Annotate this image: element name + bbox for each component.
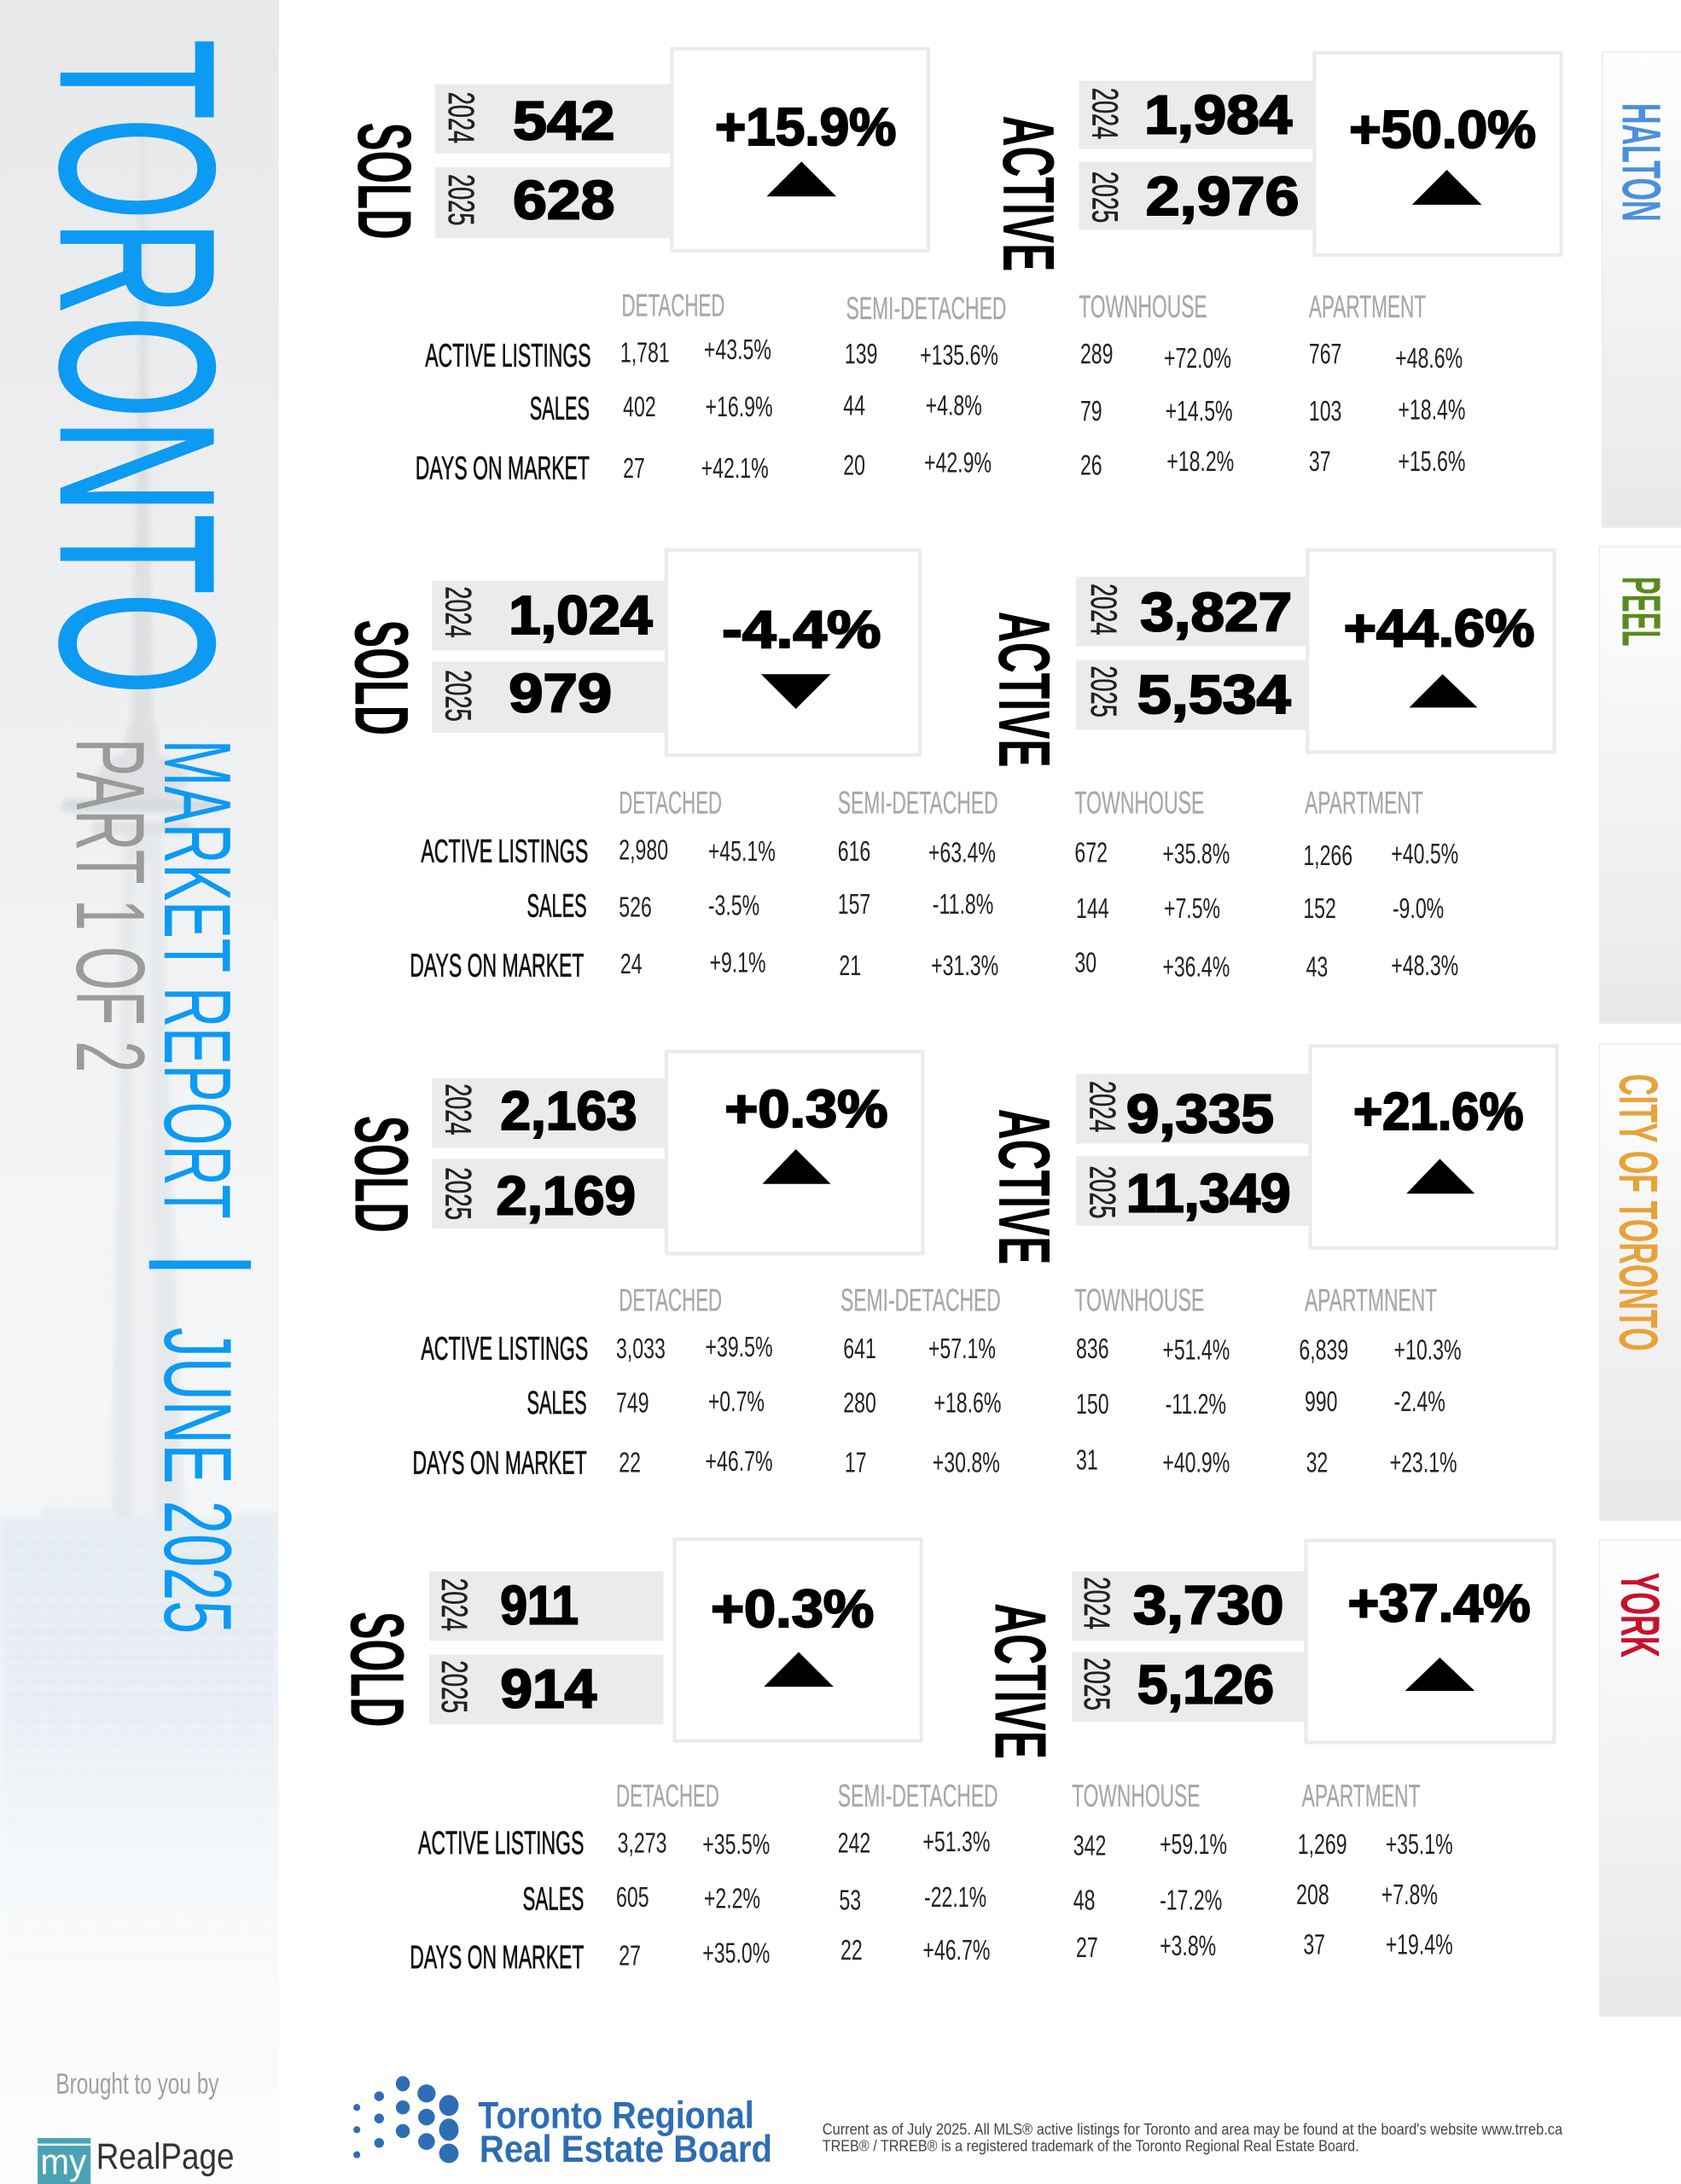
table: Peel property types: ACTIVE LISTINGS (421, 834, 588, 869)
table: Peel property types: 144 (1076, 893, 1109, 925)
table: Halton property types: 26 (1080, 450, 1102, 482)
table: Peel property types: 526 (619, 892, 652, 923)
table: City of Toronto property types: 990 (1305, 1386, 1337, 1418)
table: Peel property types: -9.0% (1393, 893, 1444, 925)
table: City of Toronto property types: 22 (619, 1448, 641, 1479)
region tab: Peel (1599, 547, 1681, 1023)
table: City of Toronto property types: +0.7% (708, 1386, 765, 1418)
table: York property types: 3,273 (618, 1827, 666, 1860)
sold comparison (340, 1052, 922, 1253)
active comparison (979, 1541, 1554, 1759)
sold comparison: 2025 (434, 1660, 474, 1713)
sold comparison: 2024 (439, 1083, 479, 1136)
region tab: York: YORK (1609, 1572, 1670, 1658)
subtitle: date: JUNE 2025 (144, 1327, 252, 1634)
region tab: Peel: PEEL (1610, 577, 1671, 647)
table: Peel property types: +45.1% (708, 836, 776, 868)
table: City of Toronto property types: +30.8% (933, 1448, 1000, 1479)
table: Halton property types: 767 (1309, 339, 1341, 370)
table: Peel property types: +36.4% (1162, 951, 1230, 984)
table: City of Toronto property types: +10.3% (1393, 1334, 1461, 1367)
table: Peel property types: 21 (839, 950, 861, 982)
table: City of Toronto property types: +23.1% (1390, 1448, 1457, 1479)
table: City of Toronto property types: 3,033 (616, 1333, 666, 1365)
active comparison: 2,976 (1146, 166, 1299, 227)
table: Peel property types: 157 (838, 889, 870, 921)
sold comparison (340, 550, 920, 755)
table: York property types: 48 (1073, 1885, 1095, 1917)
table: Halton property types: 79 (1080, 396, 1102, 427)
table: York property types: +35.1% (1386, 1829, 1453, 1861)
table: Peel property types: TOWNHOUSE (1074, 785, 1204, 820)
table: City of Toronto property types: SALES (526, 1385, 587, 1420)
table: York property types: 27 (619, 1941, 641, 1972)
table: City of Toronto property types: 749 (616, 1387, 649, 1420)
table: Halton property types: SALES (530, 390, 590, 426)
table: Peel property types: 1,266 (1303, 840, 1352, 872)
sold comparison: 914 (500, 1659, 597, 1720)
table: City of Toronto property types: -11.2% (1166, 1389, 1226, 1420)
active comparison: 9,335 (1126, 1083, 1274, 1144)
table: Halton property types: 1,781 (620, 337, 670, 369)
table: Halton property types: TOWNHOUSE (1079, 289, 1207, 324)
active comparison: 2024 (1085, 88, 1126, 139)
table: City of Toronto property types: 17 (845, 1448, 867, 1479)
active comparison: ACTIVE (983, 612, 1065, 768)
brought to you by: Brought to you by (55, 2068, 219, 2100)
table: Halton property types: +18.4% (1398, 394, 1465, 427)
table: City of Toronto property types: SEMI-DETACHED (840, 1282, 1001, 1317)
active comparison: 2024 (1077, 1577, 1117, 1629)
table: York property types: DAYS ON MARKET (410, 1939, 584, 1975)
table: York property types: 208 (1296, 1879, 1329, 1911)
active comparison: ACTIVE (979, 1603, 1061, 1759)
table: Halton property types: +15.6% (1398, 446, 1465, 478)
table: Peel property types: +40.5% (1391, 839, 1458, 870)
table: York property types: +3.8% (1160, 1931, 1216, 1962)
sold comparison: +15.9% (715, 98, 896, 157)
table: Peel property types: -3.5% (708, 891, 759, 922)
active comparison (983, 550, 1554, 768)
table: Peel property types: 30 (1074, 947, 1096, 979)
table: Peel property types: 152 (1303, 893, 1336, 925)
sold comparison: 628 (513, 170, 614, 230)
table: York property types: +19.4% (1386, 1930, 1453, 1961)
sold comparison: -4.4% (722, 601, 881, 659)
table: Halton property types: DAYS ON MARKET (416, 450, 590, 486)
table: York property types: SEMI-DETACHED (838, 1779, 998, 1814)
table: Halton property types: 44 (843, 390, 865, 422)
table: City of Toronto property types: DAYS ON MARKET (413, 1444, 587, 1480)
sold comparison: SOLD (335, 1612, 421, 1727)
table: Halton property types: ACTIVE LISTINGS (425, 337, 591, 373)
sold comparison: 979 (509, 663, 612, 723)
table: York property types: 27 (1076, 1932, 1098, 1964)
TRREB logo (353, 2076, 772, 2170)
table: City of Toronto property types: +51.4% (1162, 1334, 1230, 1367)
table: Peel property types: DAYS ON MARKET (410, 947, 584, 983)
panel: York (335, 1539, 1681, 2016)
table: City of Toronto property types: 280 (843, 1387, 876, 1420)
active comparison: 2024 (1082, 1081, 1122, 1132)
table: Peel property types: APARTMENT (1305, 785, 1423, 820)
table: City of Toronto property types: 6,839 (1299, 1334, 1348, 1367)
disclaimer text: TREB® / TRREB® is a registered trademark of the Toronto Regional Real Estate Board. (823, 2137, 1359, 2155)
sold comparison: 2,169 (497, 1166, 636, 1227)
panel: Peel (340, 547, 1681, 1023)
table: City of Toronto property types: +39.5% (706, 1332, 773, 1363)
table: City of Toronto property types: TOWNHOUSE (1074, 1282, 1204, 1317)
table: York property types: 37 (1303, 1930, 1325, 1961)
table: City of Toronto property types: DETACHED (619, 1282, 722, 1317)
panel: Halton (342, 49, 1681, 527)
table: Peel property types: 43 (1306, 951, 1328, 984)
table: Halton property types: +42.9% (924, 447, 992, 479)
table: Peel property types: 24 (620, 949, 643, 980)
logo wordmark: Toronto Regional (478, 2095, 754, 2137)
table: York property types: 342 (1073, 1831, 1106, 1862)
sold comparison: 1,024 (509, 585, 653, 646)
active comparison: ACTIVE (983, 1109, 1065, 1264)
active comparison: 2024 (1084, 584, 1124, 635)
disclaimer text: Current as of July 2025. All MLS® active listings for Toronto and area may be found at the board's website www.trreb.ca (823, 2120, 1563, 2138)
active comparison: 2025 (1084, 665, 1124, 717)
table: York property types: 242 (838, 1827, 870, 1860)
disclaimer text (823, 2120, 1563, 2155)
table: York property types: +46.7% (922, 1935, 990, 1966)
table: Halton property types: APARTMENT (1309, 289, 1426, 324)
sold comparison: +0.3% (724, 1080, 888, 1139)
table: York property types: SALES (523, 1880, 584, 1916)
table: Halton property types: 289 (1080, 339, 1114, 370)
sold comparison (335, 1539, 922, 1741)
active comparison (987, 53, 1562, 271)
table: Halton property types: +16.9% (706, 392, 773, 423)
sold comparison: 2024 (439, 586, 479, 638)
sold comparison: SOLD (340, 620, 425, 735)
table: Halton property types: SEMI-DETACHED (846, 291, 1006, 326)
active comparison: +37.4% (1348, 1574, 1531, 1633)
table: City of Toronto property types: +46.7% (706, 1446, 773, 1478)
table: York property types: +35.5% (702, 1829, 770, 1861)
active comparison: 2025 (1077, 1658, 1117, 1711)
panel: City of Toronto (340, 1044, 1681, 1520)
icon: dot cluster (353, 2076, 458, 2164)
active comparison: 5,126 (1137, 1655, 1274, 1716)
region tab: York (1599, 1540, 1681, 2016)
active comparison: ACTIVE (987, 116, 1069, 271)
table: Peel property types: +31.3% (931, 950, 998, 982)
subtitle: market report: MARKET REPORT (144, 740, 251, 1219)
table: Halton property types: +43.5% (704, 334, 771, 366)
table: City of Toronto property types: 836 (1076, 1333, 1109, 1365)
sold comparison: SOLD (342, 123, 428, 240)
table: Peel property types: +63.4% (928, 838, 996, 869)
table: Halton property types: +4.8% (926, 390, 982, 422)
table: York property types: DETACHED (616, 1779, 719, 1814)
table: Halton property types: 139 (845, 339, 877, 370)
active comparison: 3,730 (1133, 1576, 1283, 1636)
table: Peel property types: 672 (1074, 838, 1108, 869)
logo wordmark (478, 2095, 772, 2170)
sold comparison: 542 (513, 90, 614, 151)
table: Halton property types: DETACHED (622, 288, 724, 323)
table: City of Toronto property types: 31 (1076, 1444, 1098, 1477)
table: York property types: +59.1% (1160, 1829, 1227, 1861)
table: City of Toronto property types: +40.9% (1162, 1448, 1230, 1479)
table: Halton property types: +18.2% (1166, 446, 1234, 478)
sold comparison: +0.3% (711, 1580, 874, 1639)
table: Peel property types: 616 (838, 836, 870, 868)
table: City of Toronto property types: 150 (1076, 1389, 1109, 1420)
subtitle: part 1 of 2: PART 1 OF 2 (55, 738, 164, 1072)
table: York property types: 1,269 (1298, 1829, 1347, 1861)
title: TORONTO: TORONTO (15, 39, 261, 695)
logo wordmark: Real Estate Board (480, 2129, 772, 2170)
table: York property types: TOWNHOUSE (1072, 1779, 1200, 1814)
sold comparison: 2024 (434, 1578, 474, 1631)
table: Halton property types: 20 (843, 450, 865, 482)
table: York property types: -22.1% (924, 1882, 986, 1914)
table: York property types: 22 (840, 1935, 863, 1966)
sold comparison: 2,163 (500, 1081, 637, 1141)
active comparison: 5,534 (1137, 665, 1291, 725)
CN Tower background photo (61, 119, 222, 1532)
table: York property types: APARTMENT (1302, 1779, 1421, 1814)
sold comparison: 2025 (441, 174, 481, 225)
table: City of Toronto property types: 32 (1306, 1448, 1328, 1479)
table: City of Toronto property types: ACTIVE LISTINGS (421, 1330, 588, 1366)
table: Halton property types: +42.1% (701, 453, 769, 485)
city skyline background (1, 1509, 278, 1807)
table: Peel property types: +48.3% (1391, 950, 1458, 982)
myRealPage logo (38, 2136, 234, 2184)
sidebar panel (0, 0, 279, 2184)
table: York property types: 605 (616, 1882, 649, 1914)
table: York property types: +2.2% (704, 1884, 760, 1915)
table: City of Toronto property types: APARTMNENT (1305, 1282, 1437, 1317)
table: Peel property types (410, 785, 1458, 984)
active comparison: 2025 (1082, 1166, 1122, 1219)
active comparison: 11,349 (1126, 1163, 1291, 1223)
sold comparison: 2025 (439, 670, 479, 722)
sold comparison: 911 (500, 1576, 579, 1636)
table: Peel property types: SALES (526, 887, 587, 923)
table: Peel property types: -11.8% (933, 889, 993, 921)
table: Peel property types: 2,980 (619, 834, 668, 866)
table: Halton property types: 402 (623, 392, 656, 423)
table: Halton property types: +48.6% (1395, 343, 1463, 375)
active comparison (983, 1046, 1557, 1264)
myRealPage logo: my (40, 2142, 87, 2182)
active comparison: 3,827 (1140, 583, 1292, 643)
table: Halton property types: +72.0% (1164, 343, 1231, 375)
sold comparison: 2025 (439, 1167, 479, 1220)
table: City of Toronto property types: +57.1% (928, 1333, 996, 1365)
active comparison: +21.6% (1353, 1083, 1523, 1141)
table: Peel property types: +7.5% (1164, 893, 1220, 925)
table: City of Toronto property types: -2.4% (1393, 1386, 1445, 1418)
table: Halton property types: +14.5% (1166, 396, 1233, 427)
table: City of Toronto property types (413, 1282, 1461, 1480)
sold comparison (342, 49, 928, 251)
sold comparison: 2024 (441, 92, 481, 143)
table: York property types: +51.3% (922, 1827, 990, 1858)
divider bar (149, 1261, 251, 1269)
sold comparison: SOLD (340, 1116, 425, 1233)
table: Peel property types: +35.8% (1162, 839, 1230, 870)
table: Peel property types: +9.1% (709, 947, 766, 979)
table: York property types: +7.8% (1381, 1879, 1438, 1911)
table: York property types (410, 1779, 1453, 1975)
table: York property types: +35.0% (702, 1937, 770, 1970)
active comparison: +44.6% (1344, 600, 1534, 659)
table: York property types: 53 (839, 1885, 861, 1917)
region tab: Halton (1602, 52, 1681, 527)
region tab: City of Toronto: CITY OF TORONTO (1608, 1074, 1668, 1351)
table: York property types: ACTIVE LISTINGS (418, 1825, 584, 1861)
table: Halton property types: 103 (1309, 396, 1341, 427)
table: York property types: -17.2% (1160, 1885, 1222, 1917)
table: Halton property types: 37 (1309, 446, 1331, 478)
table: Peel property types: DETACHED (619, 785, 722, 820)
active comparison: 2025 (1085, 171, 1126, 223)
table: Halton property types (416, 288, 1465, 486)
table: City of Toronto property types: +18.6% (934, 1387, 1001, 1420)
active comparison: +50.0% (1349, 101, 1536, 160)
table: Halton property types: 27 (623, 453, 645, 485)
region tab: City of Toronto (1599, 1044, 1681, 1520)
table: Peel property types: SEMI-DETACHED (838, 785, 998, 820)
table: City of Toronto property types: 641 (843, 1333, 876, 1365)
active comparison: 1,984 (1144, 85, 1293, 146)
myRealPage logo: RealPage (96, 2136, 234, 2176)
table: Halton property types: +135.6% (920, 340, 998, 372)
region tab: Halton: HALTON (1610, 103, 1671, 222)
